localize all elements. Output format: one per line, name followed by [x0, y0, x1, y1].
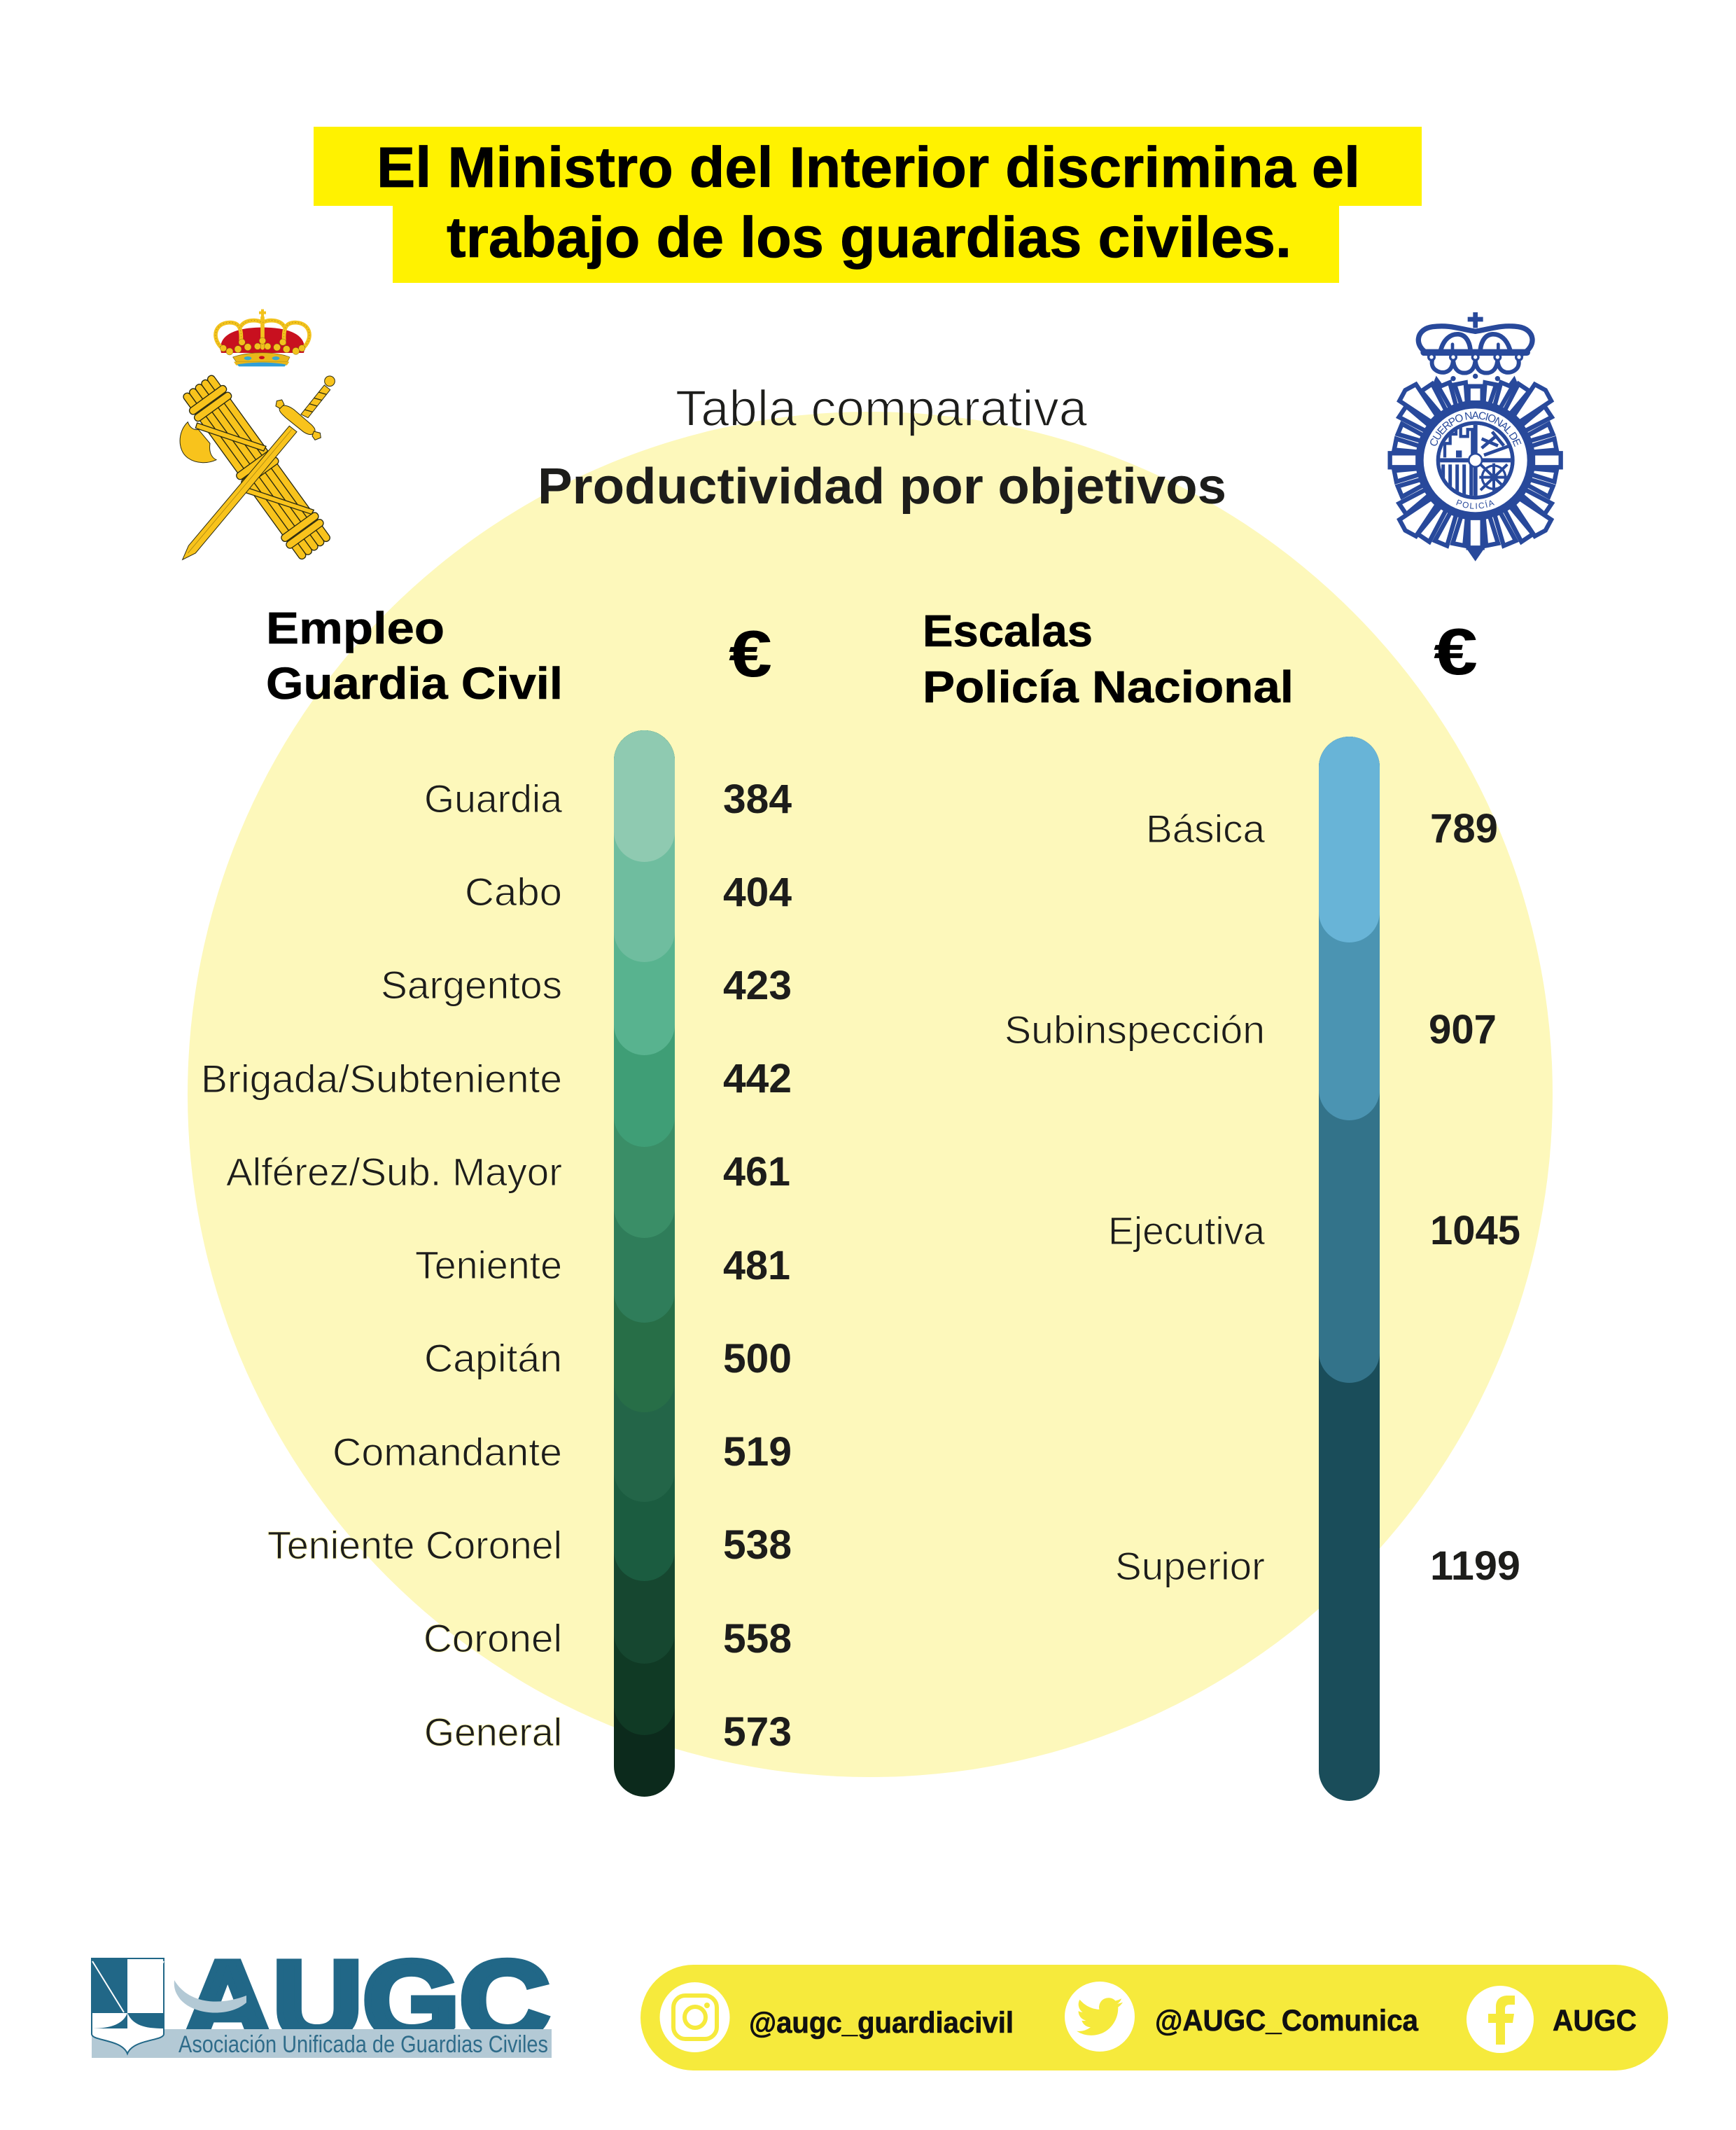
seal text: POLICÍA	[1456, 499, 1494, 509]
labels: Guardia Civil ranks: General	[424, 1710, 562, 1754]
values: Guardia Civil euros: 442	[723, 1056, 792, 1101]
title banner: El Ministro del Interior discrimina el	[377, 136, 1360, 200]
values: Policia Nacional euros	[1429, 806, 1520, 1589]
logo: AUGC	[92, 1937, 552, 2063]
column heading: Empleo Guardia Civil	[266, 603, 563, 709]
text: instagram handle: @augc_guardiacivil	[749, 2006, 1014, 2040]
labels: Policia Nacional scales: Subinspección	[1004, 1008, 1265, 1052]
labels: Policia Nacional scales: Básica	[1146, 807, 1266, 851]
logo shield	[92, 1958, 164, 2054]
text: twitter handle: @AUGC_Comunica	[1155, 2004, 1419, 2038]
labels: Guardia Civil ranks: Sargentos	[381, 963, 562, 1007]
badge rays	[1390, 382, 1561, 548]
title banner: trabajo de los guardias civiles.	[447, 206, 1292, 270]
icon: facebook	[1466, 1986, 1534, 2053]
labels: Policia Nacional scales: Ejecutiva	[1108, 1209, 1266, 1253]
icon: royal crown	[216, 309, 309, 366]
subtitle: tabla comparativa: Tabla comparativa	[676, 381, 1088, 437]
column heading: Empleo Guardia Civil: Empleo	[266, 603, 444, 653]
logo tagline: Asociación Unificada de Guardias Civiles	[178, 2031, 548, 2058]
values: Guardia Civil euros: 519	[723, 1429, 792, 1475]
labels: Policia Nacional scales: Superior	[1115, 1544, 1265, 1588]
values: Guardia Civil euros: 500	[723, 1336, 792, 1381]
values: Guardia Civil euros: 384	[723, 777, 792, 822]
green stacked bar: Guardia Civil	[614, 730, 675, 1797]
column heading: Escalas Policia Nacional: Escalas	[923, 606, 1093, 656]
title banner	[314, 127, 1422, 283]
icon: sword	[183, 376, 335, 559]
values: Guardia Civil euros: 573	[723, 1709, 792, 1755]
values: Guardia Civil euros	[723, 777, 792, 1755]
labels: Guardia Civil ranks: Teniente	[415, 1243, 562, 1287]
icon: twitter	[1065, 1982, 1135, 2052]
badge spikes	[1432, 376, 1519, 562]
seal text: CUERPO NACIONAL DE	[1430, 412, 1522, 447]
column heading: Empleo Guardia Civil: Guardia Civil	[266, 658, 563, 709]
logo band	[92, 2029, 552, 2058]
social media bar	[640, 1965, 1668, 2070]
seal quarters	[1436, 420, 1515, 504]
icon: instagram	[659, 1982, 729, 2052]
icon: fasces	[179, 373, 334, 562]
values: Policia Nacional euros: 789	[1430, 806, 1498, 851]
column heading: Escalas Policia Nacional	[923, 606, 1294, 712]
labels: Guardia Civil ranks: Brigada/Subteniente	[201, 1057, 562, 1101]
labels: Guardia Civil ranks: Comandante	[332, 1430, 562, 1474]
values: Guardia Civil euros: 481	[723, 1243, 790, 1288]
labels: Guardia Civil ranks: Teniente Coronel	[267, 1523, 562, 1567]
labels: Guardia Civil ranks: Guardia	[424, 777, 563, 821]
background circle	[188, 412, 1553, 1777]
values: Policia Nacional euros: 1045	[1430, 1208, 1520, 1253]
values: Policia Nacional euros: 907	[1429, 1007, 1497, 1052]
labels: Guardia Civil ranks	[201, 777, 563, 1754]
values: Guardia Civil euros: 538	[723, 1522, 792, 1568]
labels: Guardia Civil ranks: Cabo	[465, 870, 562, 914]
icon: Policia Nacional badge	[1387, 312, 1563, 562]
labels: Policia Nacional scales	[1004, 807, 1266, 1588]
heading: productividad por objetivos: Productividad por objetivos	[538, 459, 1226, 515]
icon: Guardia Civil emblem	[179, 309, 335, 562]
values: Guardia Civil euros: 423	[723, 963, 792, 1008]
values: Guardia Civil euros: 404	[723, 870, 792, 915]
logo swoosh	[174, 1980, 246, 2013]
euro symbol left: €	[729, 617, 772, 690]
values: Guardia Civil euros: 461	[723, 1149, 790, 1195]
values: Guardia Civil euros: 558	[723, 1616, 792, 1662]
column heading: Escalas Policia Nacional: Policía Nacional	[923, 662, 1294, 712]
labels: Guardia Civil ranks: Coronel	[424, 1616, 562, 1660]
seal text	[1430, 412, 1522, 509]
values: Policia Nacional euros: 1199	[1430, 1543, 1520, 1589]
logo letters: AUGC	[183, 1937, 550, 2063]
blue stacked bar: Policia Nacional	[1319, 737, 1380, 1801]
seal ring	[1421, 406, 1530, 515]
text: facebook handle: AUGC	[1553, 2004, 1637, 2038]
crown	[1418, 312, 1532, 354]
euro symbol right: €	[1434, 615, 1478, 688]
labels: Guardia Civil ranks: Capitán	[424, 1336, 562, 1380]
labels: Guardia Civil ranks: Alférez/Sub. Mayor	[226, 1150, 562, 1194]
icon: axe head	[180, 422, 216, 463]
